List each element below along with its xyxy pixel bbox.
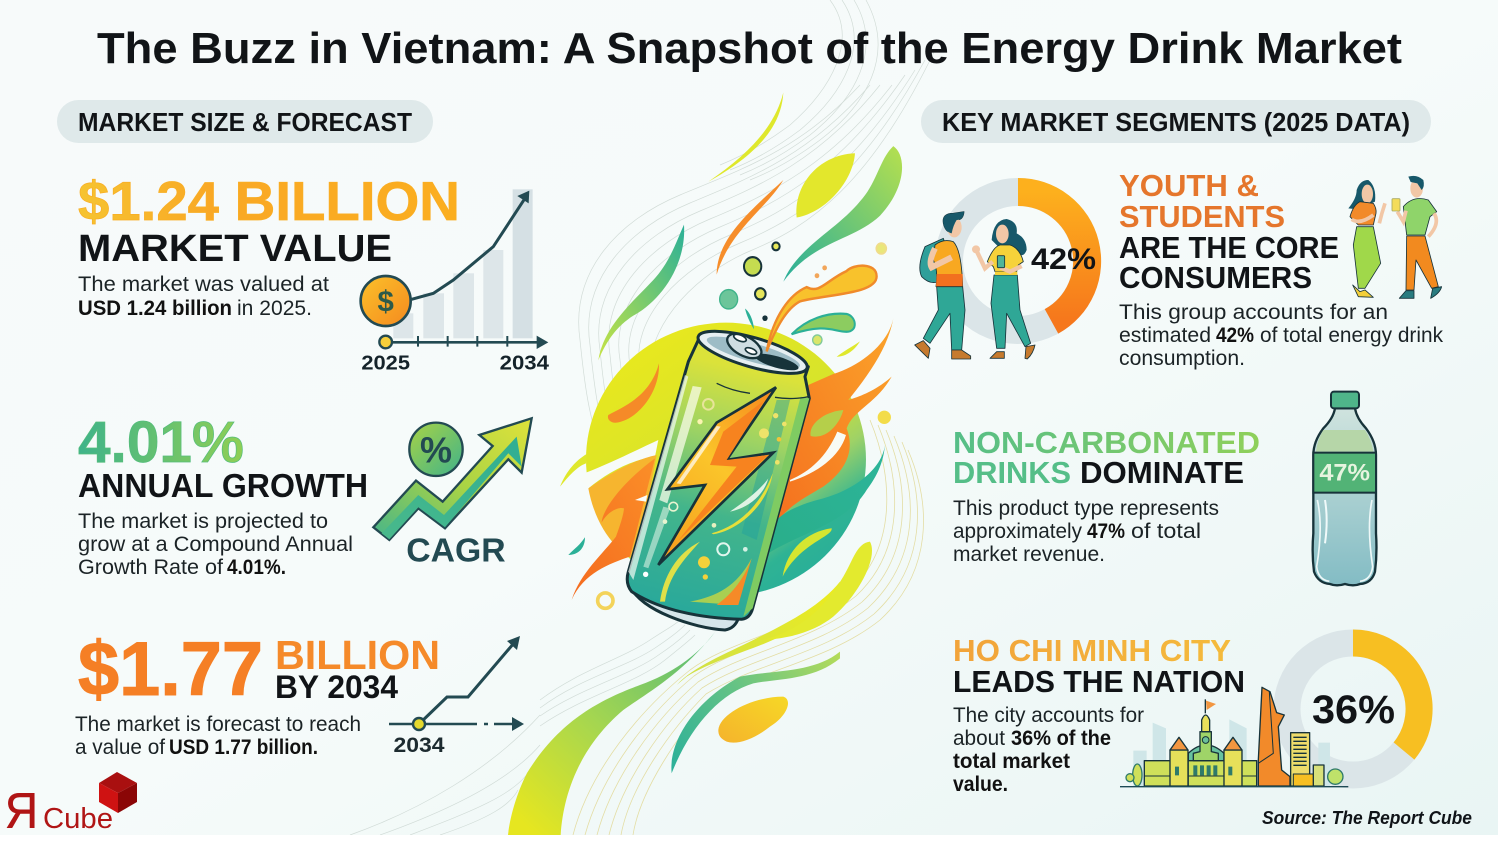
segment description: market revenue. [953,542,1105,566]
icon: city skyline [1120,687,1348,787]
woman [992,219,1027,255]
icon: two friends with drinks [1348,176,1442,298]
segment heading: LEADS THE NATION [953,664,1245,699]
forecast figure: $1.77 [78,627,263,712]
donut value: 36% [1312,688,1395,732]
segment description: approximately [953,519,1082,543]
right heading pill: key market segments: KEY MARKET SEGMENTS (2025 DATA) [942,107,1410,137]
forecast description: USD 1.77 billion. [169,735,318,759]
segment description: consumption. [1119,346,1245,370]
forecast description: a value of [75,735,165,759]
growth description [78,509,353,579]
growth bar chart with coin [361,189,550,374]
icon: bottle 47 percent [1313,392,1376,585]
title: The Buzz in Vietnam: A Snapshot of the Energy Drink Market [97,24,1402,73]
central illustration: energy drink can with flames [508,92,902,835]
flowing contour lines [350,0,935,835]
market value description: in 2025. [237,296,312,320]
market value description: The market was valued at [78,272,329,296]
CAGR arrow icon: CAGR [406,533,506,570]
can body [627,340,809,619]
logo: RCube: Cube [43,803,113,835]
growth description: Growth Rate of [78,555,223,579]
segment description: 36% of the [1011,726,1111,750]
segment heading: HO CHI MINH CITY [953,633,1231,668]
donut chart 36 percent [1287,643,1419,775]
can details [643,399,787,605]
segment heading [953,425,1260,490]
segment description: of total [1131,519,1201,543]
segment heading: DRINKS [953,455,1071,490]
growth label: ANNUAL GROWTH [78,467,368,504]
segment description [953,703,1144,796]
segment description [953,496,1219,566]
left heading pill: market size and forecast [57,100,433,143]
logo: RCube: R [5,783,38,839]
sun circle and flames [560,318,893,640]
can rim and tab [694,323,811,382]
market value description [78,272,329,320]
panel: annual growth [78,410,532,579]
panel: forecast by 2034 [75,627,524,759]
segment description: This product type represents [953,496,1219,520]
donut chart 42 percent [949,192,1087,330]
segment description: 42% [1216,323,1254,347]
forecast unit: BILLION [275,632,440,678]
lightning bolt [658,387,776,565]
panel: ho chi minh city [953,633,1419,796]
market value description: USD 1.24 billion [78,296,232,320]
forecast description: The market is forecast to reach [75,712,361,736]
growth description: 4.01%. [227,555,286,579]
panel: youth and students [915,168,1443,370]
man [1410,179,1423,198]
donut value: 42% [1031,243,1096,276]
segment description: total market [953,749,1070,773]
growth description: grow at a Compound Annual [78,532,353,556]
segment description: of total energy drink [1260,323,1443,347]
forecast year: BY 2034 [275,669,398,705]
market value figure: $1.24 BILLION [78,170,460,232]
segment heading: NON-CARBONATED [953,425,1260,460]
forecast description [75,712,361,759]
icon: two students walking [915,212,1035,359]
can [627,323,811,630]
segment heading: DOMINATE [1080,455,1244,490]
segment description [1119,300,1443,370]
left heading pill: market size and forecast: MARKET SIZE & FORECAST [78,107,412,137]
growth bar chart with coin: 2034 [500,351,550,374]
segment description: about [953,726,1005,750]
forecast timeline arrow [389,636,524,757]
source note: Source: The Report Cube [1262,808,1472,828]
CAGR arrow icon: % [420,430,452,471]
panel: non-carbonated drinks [953,392,1376,585]
panel: market value [78,170,550,374]
right heading pill: key market segments [921,100,1431,143]
segment heading [953,633,1245,699]
white footer strip [0,835,1498,844]
CAGR arrow icon [373,418,532,570]
segment description: estimated [1119,323,1211,347]
segment heading [1119,168,1339,295]
market value label: MARKET VALUE [78,228,392,270]
woman [1348,180,1375,209]
logo: RCube [5,772,137,839]
segment heading: YOUTH & [1119,168,1259,203]
forecast timeline arrow: 2034 [394,734,445,757]
segment heading: ARE THE CORE [1119,230,1339,265]
segment heading: STUDENTS [1119,199,1285,234]
growth description: The market is projected to [78,509,328,533]
segment description: This group accounts for an [1119,300,1388,324]
swirls below the can [508,582,840,835]
segment description: 47% [1087,519,1125,543]
growth rate figure: 4.01% [78,410,244,475]
segment description: The city accounts for [953,703,1144,727]
segment heading: CONSUMERS [1119,260,1312,295]
growth bar chart with coin: $ [378,285,394,318]
icon: bottle 47 percent: 47% [1319,460,1370,487]
growth bar chart with coin: 2025 [361,351,410,374]
leaves, bubbles and splash above the can [598,92,902,360]
man [915,212,971,359]
segment description: value. [953,772,1008,796]
can base [631,587,738,630]
